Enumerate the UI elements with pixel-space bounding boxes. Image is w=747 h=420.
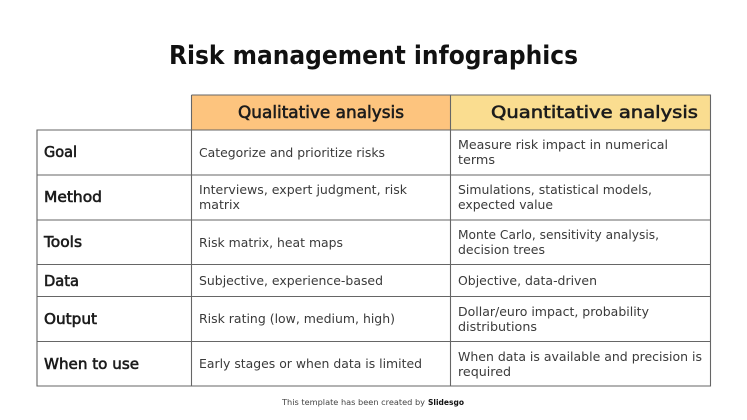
row: when to use: required — [458, 364, 511, 379]
row: goal: terms — [458, 152, 495, 167]
row: output: Output — [44, 310, 97, 328]
row: method: matrix — [199, 197, 240, 212]
row: method: Simulations, statistical models, — [458, 182, 652, 197]
footer credit: Slidesgo — [428, 398, 464, 407]
row: method: expected value — [458, 197, 553, 212]
row: data — [44, 272, 597, 290]
row: method — [44, 182, 652, 212]
row: tools: decision trees — [458, 242, 545, 257]
title: Risk management infographics — [169, 41, 578, 71]
footer credit: This template has been created by — [281, 398, 426, 407]
row: when to use: Early stages or when data is limited — [199, 356, 422, 371]
row: data: Data — [44, 272, 79, 290]
row: goal: Categorize and prioritize risks — [199, 145, 385, 160]
row: tools: Monte Carlo, sensitivity analysis, — [458, 227, 659, 242]
row: when to use: When data is available and precision is — [458, 349, 702, 364]
header: qualitative analysis: Qualitative analysis — [238, 103, 404, 123]
row: data: Objective, data-driven — [458, 273, 597, 288]
row: tools: Risk matrix, heat maps — [199, 235, 343, 250]
row: goal — [44, 137, 668, 167]
header: qualitative analysis — [192, 95, 450, 130]
row: output: distributions — [458, 319, 537, 334]
row: method: Interviews, expert judgment, risk — [199, 182, 408, 197]
row: when to use: When to use — [44, 355, 139, 373]
row: data: Subjective, experience-based — [199, 273, 383, 288]
row: goal: Goal — [44, 143, 77, 161]
row: tools: Tools — [43, 233, 82, 251]
header: quantitative analysis — [450, 95, 710, 130]
row: method: Method — [44, 188, 102, 206]
row: when to use — [44, 349, 702, 379]
row: goal: Measure risk impact in numerical — [458, 137, 668, 152]
row: output: Dollar/euro impact, probability — [458, 304, 650, 319]
header: quantitative analysis: Quantitative analysis — [491, 103, 698, 123]
comparison table — [37, 95, 710, 386]
row: tools — [43, 227, 659, 257]
row: output: Risk rating (low, medium, high) — [199, 311, 395, 326]
row: output — [44, 304, 650, 334]
